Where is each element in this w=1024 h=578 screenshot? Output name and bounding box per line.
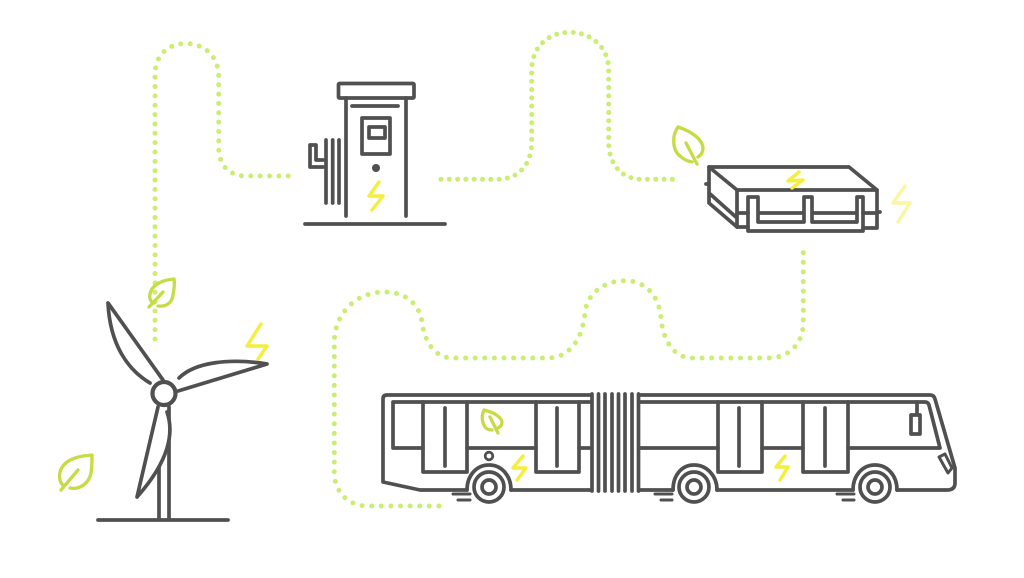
battery pack <box>706 167 880 231</box>
turbine blade right <box>178 361 267 391</box>
motion lines <box>453 494 854 500</box>
headlight <box>939 454 952 473</box>
battery left side <box>706 167 737 227</box>
mirror <box>911 402 920 434</box>
rear wheel <box>467 465 511 502</box>
charger plug <box>310 145 323 167</box>
bus bolt front <box>776 456 788 480</box>
front wheel <box>853 465 897 502</box>
turbine base and tower <box>98 407 228 520</box>
charger display <box>369 127 385 138</box>
front section door 1 <box>718 402 762 472</box>
rear section windows <box>393 402 590 448</box>
battery bolt <box>788 172 803 188</box>
turbine blade lower <box>137 407 170 497</box>
leaf on dotted path <box>149 279 174 307</box>
turbine blade upper <box>108 303 163 383</box>
leaf near turbine base <box>60 455 92 490</box>
dotted path: charger to battery <box>441 32 677 179</box>
charger base <box>305 222 445 226</box>
rear bus section outline <box>383 395 590 490</box>
small round indicator <box>485 452 493 460</box>
charger screen <box>362 118 390 154</box>
charging station <box>305 84 445 224</box>
wind turbine <box>98 303 267 520</box>
dotted path: battery to bus <box>334 253 803 506</box>
bus leaf <box>482 410 502 433</box>
turbine lightning bolt <box>247 324 267 359</box>
charger button <box>372 164 380 172</box>
pale bolt beside battery <box>893 186 910 222</box>
charger roof <box>338 84 414 98</box>
battery top face <box>709 167 877 190</box>
rear section door 2 <box>536 402 579 472</box>
middle wheel <box>673 465 717 502</box>
dotted path: turbine to charger <box>155 44 293 339</box>
turbine hub <box>152 382 176 405</box>
rear section door 1 <box>423 402 467 472</box>
leaf near battery <box>674 127 703 164</box>
charger cable coil <box>326 140 339 203</box>
battery tray <box>748 197 863 231</box>
charger body <box>346 98 406 216</box>
front bus section outline <box>640 395 955 490</box>
front section door 2 <box>803 402 848 472</box>
charger bolt <box>369 182 383 210</box>
front section windows <box>640 402 940 448</box>
accordion joint <box>592 394 638 491</box>
bus bolt rear <box>513 456 526 480</box>
battery front face <box>737 190 880 228</box>
articulated electric bus <box>383 394 955 502</box>
